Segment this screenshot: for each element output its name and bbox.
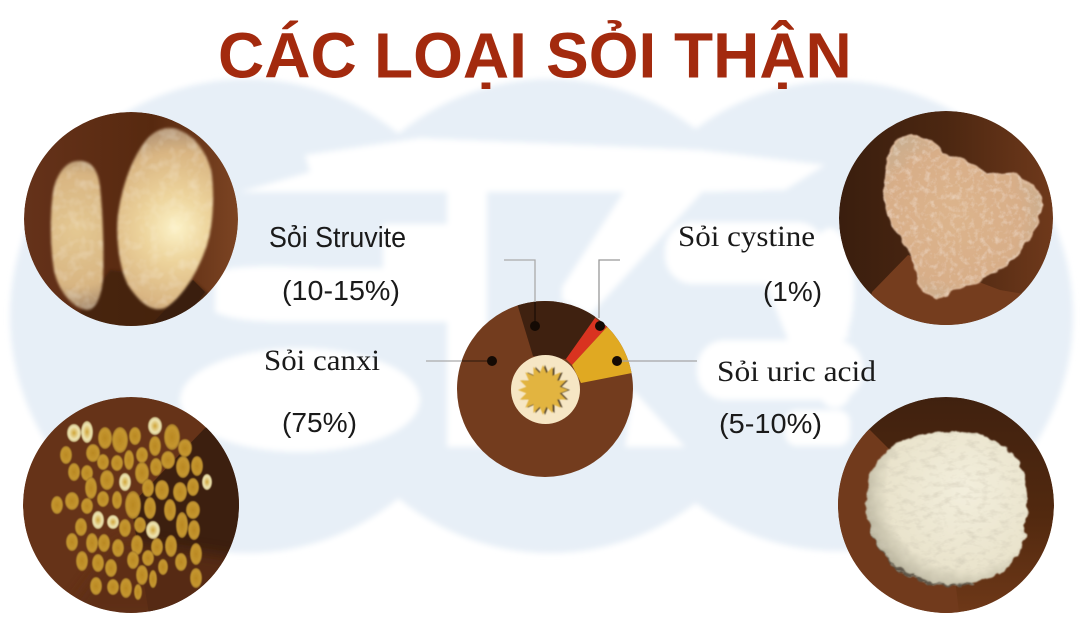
label: cystine name: Sỏi cystine [678,220,815,253]
panel: cystine stone photo [839,111,1060,340]
pie segment: uric acid [572,327,632,383]
label: struvite percent: (10-15%) [282,275,400,306]
title: SỎI [546,18,656,92]
label: struvite name: Sỏi Struvite [269,222,406,254]
icon: small struvite stone [51,161,103,310]
icon: central stone disc [511,355,580,424]
icon: uric acid stone [867,432,1027,584]
chart: kidney stone share pie [426,260,697,477]
icon: calcium stone grains [51,417,212,600]
icon: uric acid stone shadow [870,524,975,588]
leader: cystine [595,260,620,331]
panel: uric acid stone photo [830,397,1054,620]
label: calcium percent: (75%) [282,407,357,438]
leader: uric acid [612,356,697,366]
title: LOẠI [374,20,527,92]
leader: calcium [426,356,497,366]
title: CÁC [218,20,357,92]
leader: struvite [504,260,540,331]
label: calcium name: Sỏi canxi [264,344,380,377]
panel: calcium stones photo [23,397,250,620]
icon: spiky stone [518,365,570,415]
label: uric acid percent: (5-10%) [719,408,822,439]
title: THẬN [674,18,852,92]
label: cystine percent: (1%) [763,276,822,307]
panel: struvite stone photo [24,112,238,326]
pie segment: cystine [566,318,607,365]
icon: cystine stone [884,135,1043,300]
label: uric acid name: Sỏi uric acid [717,355,876,388]
icon: large struvite stone [117,128,213,309]
pie segment: struvite [518,301,595,359]
